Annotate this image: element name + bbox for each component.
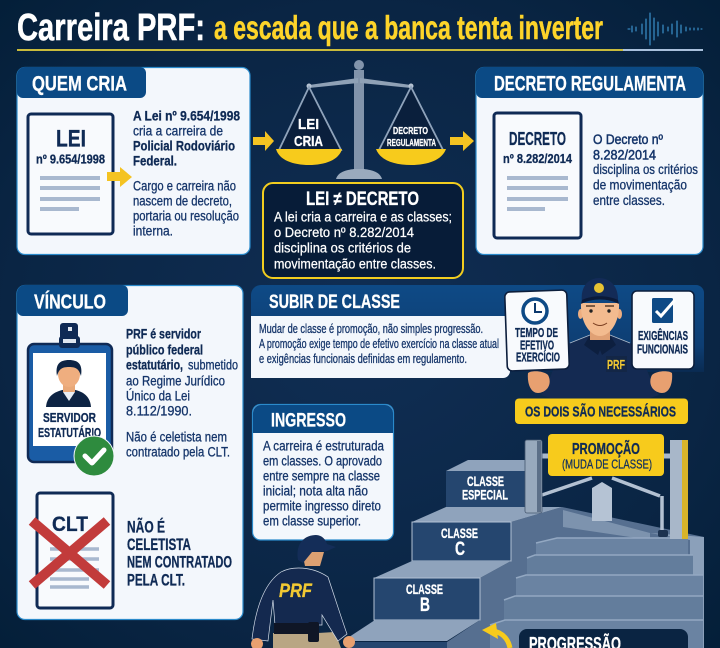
text: subir de classe: e exigências funcionais definidas em regulamento. bbox=[259, 351, 467, 366]
icon: crossed clt document bbox=[32, 493, 113, 608]
icon: audio waveform bbox=[628, 13, 702, 45]
text: decreto disciplina: de movimentação bbox=[593, 178, 687, 192]
sign: exigencias funcionais bbox=[632, 291, 694, 369]
text: prf servidor: 8.112/1990. bbox=[126, 404, 192, 418]
text: prf servidor: Único da Lei bbox=[126, 388, 190, 404]
text: prf servidor: público federal bbox=[126, 342, 203, 358]
step: classe c: C bbox=[455, 539, 465, 560]
text: decreto disciplina: disciplina os critérios bbox=[593, 162, 698, 177]
right side mass bbox=[447, 507, 704, 648]
left pan bbox=[276, 87, 342, 165]
callout: progressao bbox=[519, 629, 688, 648]
text: ingresso: entre sempre na classe bbox=[263, 468, 380, 484]
left pan: CRIA bbox=[294, 133, 323, 150]
sign: exigencias funcionais: FUNCIONAIS bbox=[637, 342, 688, 356]
step: classe especial: ESPECIAL bbox=[462, 488, 508, 502]
document: lei: nº 9.654/1998 bbox=[36, 152, 105, 166]
text: prf servidor: estatutário, bbox=[126, 358, 183, 372]
text: prf servidor bbox=[126, 326, 238, 460]
icon: id badge: ESTATUTÁRIO bbox=[38, 425, 101, 440]
callout: lei diferente de decreto: A lei cria a carreira e as classes; bbox=[274, 210, 452, 224]
callout: promocao: (MUDA DE CLASSE) bbox=[562, 458, 652, 472]
text: ingresso: inicial; nota alta não bbox=[263, 484, 368, 498]
arrow: progressao curved bbox=[482, 623, 510, 648]
text: nao e celetista bbox=[127, 516, 232, 590]
callout: lei diferente de decreto: disciplina os critérios de bbox=[274, 240, 411, 256]
text: decreto disciplina: O Decreto nº bbox=[593, 132, 663, 147]
text: ingresso: permite ingresso direto bbox=[263, 498, 381, 514]
text: prf servidor: submetido bbox=[188, 358, 238, 372]
panel: vinculo bbox=[17, 285, 243, 620]
panel: ingresso bbox=[252, 404, 394, 540]
text: lei cria a carreira bbox=[133, 108, 240, 238]
step: classe c bbox=[412, 507, 562, 561]
illustration: promotion gate bbox=[525, 440, 688, 539]
icon: balance scale bbox=[276, 60, 446, 179]
arrow: scale to decreto bbox=[450, 131, 474, 151]
banner: os dois sao necessarios bbox=[515, 398, 688, 424]
right pan bbox=[376, 87, 446, 165]
step: classe b: CLASSE bbox=[406, 582, 443, 597]
text: nao e celetista: NÃO É bbox=[127, 516, 165, 536]
title bbox=[17, 7, 603, 49]
sign: tempo de efetivo exercicio: TEMPO DE bbox=[515, 326, 558, 340]
text: nao e celetista: NEM CONTRATADO bbox=[127, 554, 232, 572]
text: lei cria a carreira: Federal. bbox=[133, 154, 177, 168]
document: decreto: DECRETO bbox=[509, 129, 566, 149]
illustration: officer with signs bbox=[505, 278, 694, 398]
text: prf servidor: Não é celetista nem bbox=[126, 430, 227, 444]
illustration: staircase bbox=[343, 460, 704, 648]
document: decreto bbox=[494, 113, 581, 238]
document: lei bbox=[28, 114, 113, 234]
panel: subir de classe bbox=[251, 285, 704, 378]
panel: ingresso: INGRESSO bbox=[271, 410, 346, 432]
document: decreto: nº 8.282/2014 bbox=[503, 151, 573, 166]
text: prf servidor: ao Regime Jurídico bbox=[126, 374, 225, 388]
text: ingresso: em classe superior. bbox=[263, 514, 361, 528]
arrow: lei to text bbox=[107, 167, 132, 187]
text: nao e celetista: CELETISTA bbox=[127, 536, 191, 554]
sign: tempo de efetivo exercicio: EFETIVO bbox=[520, 338, 554, 352]
callout: lei diferente de decreto bbox=[263, 183, 463, 278]
callout: promocao: PROMOÇÃO bbox=[572, 440, 640, 458]
text: lei cria a carreira: Cargo e carreira não bbox=[133, 178, 236, 194]
panel: quem cria bbox=[17, 67, 250, 254]
step: classe a bbox=[343, 620, 480, 648]
text: decreto disciplina: 8.282/2014 bbox=[593, 148, 656, 162]
sign: tempo de efetivo exercicio: EXERCÍCIO bbox=[516, 350, 560, 364]
illustration: officer from behind: PRF bbox=[279, 581, 313, 602]
header: decreto regulamenta bbox=[476, 67, 703, 98]
text: subir de classe: Mudar de classe é promoção, não simples progressão. bbox=[259, 321, 483, 336]
icon: id badge bbox=[28, 323, 114, 476]
sign: tempo de efetivo exercicio bbox=[505, 290, 569, 371]
header: quem cria: QUEM CRIA bbox=[32, 73, 127, 96]
callout: lei diferente de decreto: movimentação entre classes. bbox=[274, 256, 436, 272]
header: quem cria bbox=[17, 67, 146, 98]
text: decreto disciplina: entre classes. bbox=[593, 193, 665, 208]
panel: subir de classe: SUBIR DE CLASSE bbox=[269, 291, 400, 313]
document: lei: LEI bbox=[56, 126, 86, 152]
text: ingresso: A carreira é estruturada bbox=[263, 438, 384, 454]
officer portrait bbox=[46, 360, 91, 407]
step: classe especial bbox=[446, 460, 525, 507]
text: lei cria a carreira: A Lei nº 9.654/1998 bbox=[133, 108, 240, 124]
arrow: left to scale bbox=[253, 131, 274, 151]
left pan: LEI bbox=[298, 116, 319, 133]
step: classe b bbox=[374, 561, 511, 620]
text: decreto disciplina bbox=[593, 132, 698, 208]
right pan: DECRETO bbox=[393, 125, 428, 137]
header: vinculo bbox=[17, 285, 128, 316]
right pan: REGULAMENTA bbox=[387, 138, 436, 149]
icon: id badge: SERVIDOR bbox=[43, 410, 96, 425]
text: ingresso bbox=[263, 438, 384, 528]
title: Carreira PRF: bbox=[17, 7, 205, 49]
text: subir de classe bbox=[259, 321, 499, 366]
header: vinculo: VÍNCULO bbox=[34, 290, 106, 314]
sign: exigencias funcionais: EXIGÊNCIAS bbox=[638, 328, 688, 343]
text: lei cria a carreira: portaria ou resolução bbox=[133, 208, 239, 224]
step: classe c: CLASSE bbox=[441, 526, 478, 541]
text: lei cria a carreira: cria a carreira de bbox=[133, 124, 223, 138]
text: ingresso: em classes. O aprovado bbox=[263, 454, 382, 468]
text: nao e celetista: PELA CLT. bbox=[127, 572, 185, 590]
right stairs bbox=[536, 538, 688, 557]
text: lei cria a carreira: interna. bbox=[133, 224, 173, 238]
text: lei cria a carreira: Policial Rodoviário bbox=[133, 138, 235, 154]
callout: lei diferente de decreto: LEI ≠ DECRETO bbox=[306, 189, 419, 210]
icon: crossed clt document: CLT bbox=[52, 513, 88, 536]
step: classe especial: CLASSE bbox=[467, 474, 504, 489]
text: prf servidor: PRF é servidor bbox=[126, 326, 202, 342]
illustration: officer with signs: PRF bbox=[607, 357, 625, 372]
callout: promocao bbox=[548, 434, 664, 476]
icon: green check bbox=[74, 436, 114, 476]
panel: decreto regulamenta bbox=[476, 67, 703, 254]
illustration: officer from behind bbox=[251, 535, 355, 648]
text: prf servidor: contratado pela CLT. bbox=[126, 444, 230, 460]
callout: lei diferente de decreto: o Decreto nº 8.282/2014 bbox=[274, 225, 414, 240]
step: classe b: B bbox=[420, 595, 430, 616]
text: lei cria a carreira: nascem de decreto, bbox=[133, 194, 232, 208]
text: subir de classe: A promoção exige tempo de efetivo exercício na classe atual bbox=[259, 336, 499, 351]
